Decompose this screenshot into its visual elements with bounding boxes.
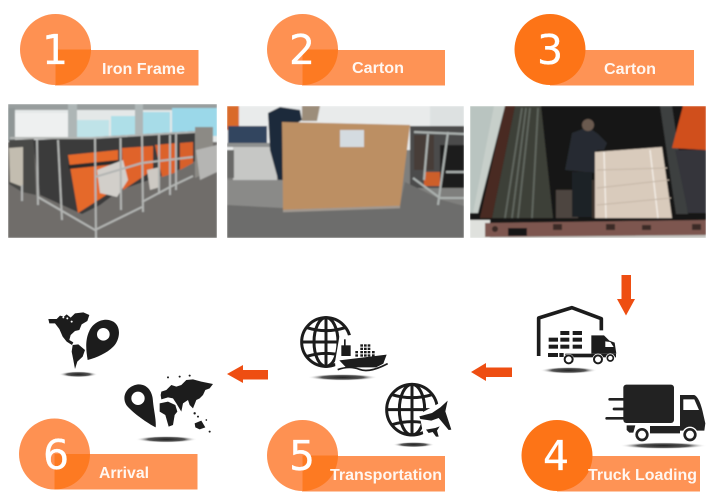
arrow: down to step 4 xyxy=(617,275,635,316)
icon: warehouse with truck xyxy=(539,308,616,374)
photo: machines in iron frames xyxy=(8,104,217,238)
step 5 badge: Transportation xyxy=(267,420,445,492)
icon: Eurasia and Africa map with pin xyxy=(124,375,213,443)
photo: large carton in warehouse xyxy=(227,106,464,238)
step 6 badge: Arrival xyxy=(19,418,198,490)
icon: globe with airplane xyxy=(387,384,456,447)
step 2 badge: Carton xyxy=(267,14,445,86)
icon: delivery truck xyxy=(607,385,707,449)
icon: Americas map with pin xyxy=(48,312,119,377)
step 6 badge: Arrival: 6 xyxy=(43,431,69,479)
step 5 badge: Transportation: Transportation xyxy=(330,467,442,484)
step 2 badge: Carton: 2 xyxy=(289,26,315,74)
step 1 badge: Iron Frame xyxy=(20,14,198,86)
icon: globe with ship xyxy=(302,318,393,381)
step 6 badge: Arrival: Arrival xyxy=(99,465,149,482)
step 2 badge: Carton: Carton xyxy=(352,60,404,77)
step 3 badge: Carton: 3 xyxy=(537,26,563,74)
step 1 badge: Iron Frame: Iron Frame xyxy=(102,61,185,78)
step 4 badge: Truck Loading: 4 xyxy=(543,432,569,480)
step 3 badge: Carton xyxy=(514,14,694,86)
step 4 badge: Truck Loading: Truck Loading xyxy=(588,467,697,484)
step 4 badge: Truck Loading xyxy=(522,420,700,492)
step 3 badge: Carton: Carton xyxy=(604,61,656,78)
photo: carton loaded in container xyxy=(470,106,706,238)
step 1 badge: Iron Frame: 1 xyxy=(42,26,68,74)
step 5 badge: Transportation: 5 xyxy=(289,432,315,480)
arrow: left from step 4 to step 5 xyxy=(471,363,512,381)
arrow: left from step 5 to step 6 xyxy=(227,365,268,383)
